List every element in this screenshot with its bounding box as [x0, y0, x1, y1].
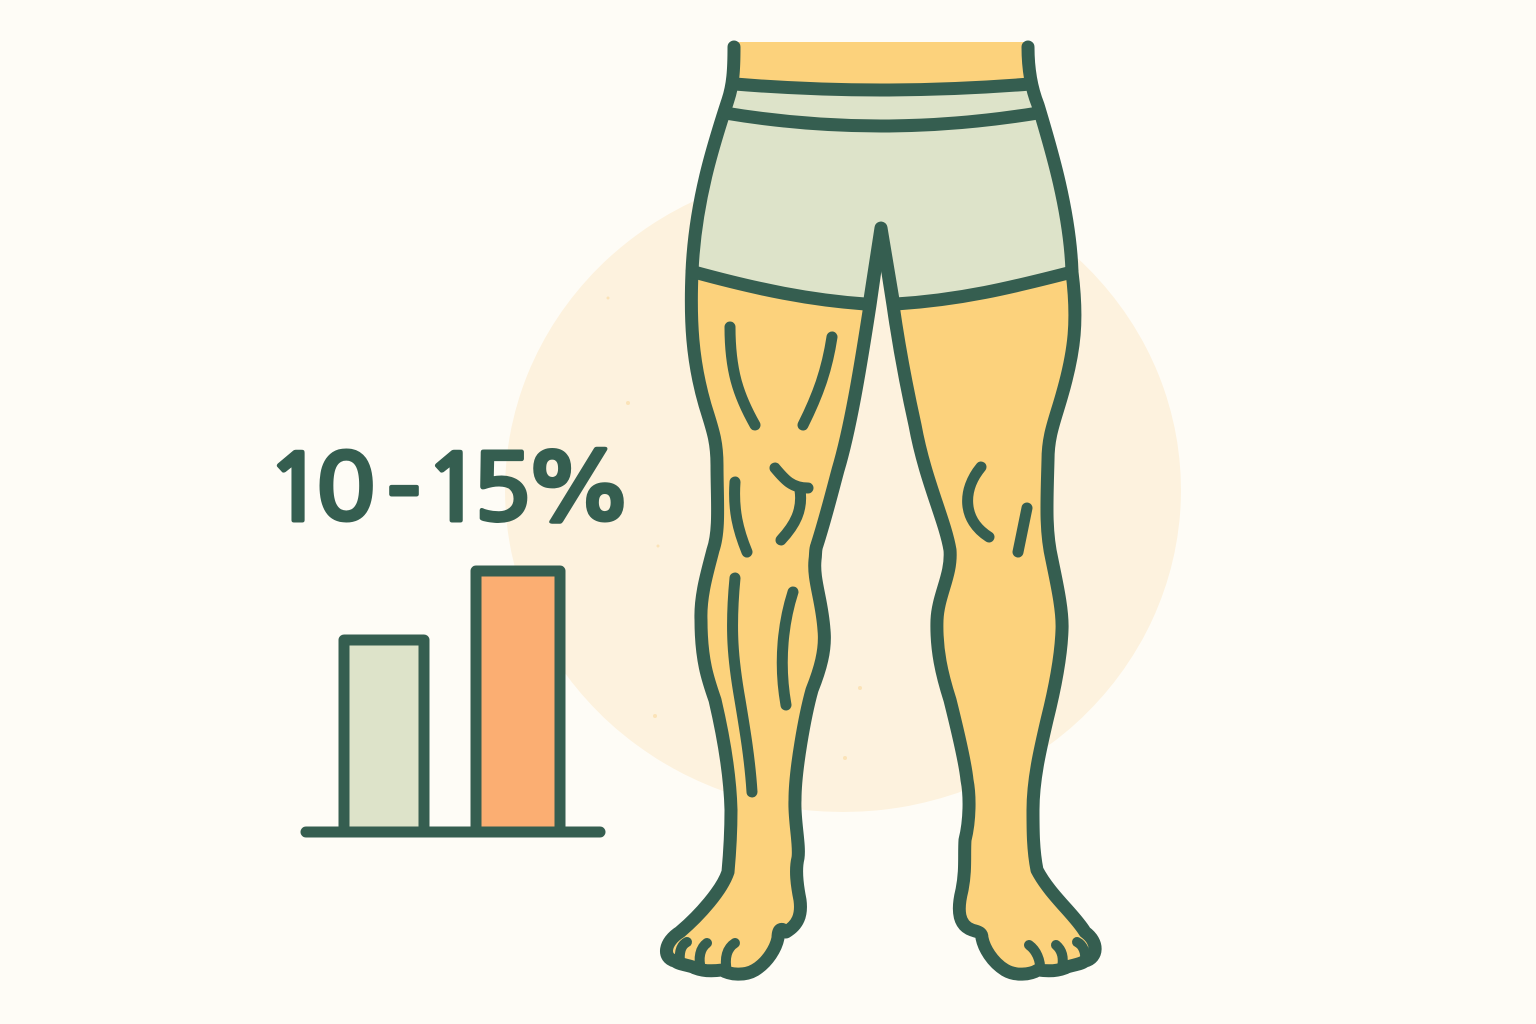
background circle: [505, 168, 1181, 812]
shorts fill: [692, 85, 1072, 304]
left foot toes: [680, 942, 735, 971]
illustration: legs wearing shorts: [666, 42, 1095, 974]
right leg: [881, 228, 1095, 974]
bar: higher: [476, 571, 560, 832]
bar chart: [306, 571, 600, 832]
right foot toes: [1029, 942, 1085, 971]
waist skin: [737, 42, 1026, 92]
left leg muscle lines: [730, 327, 832, 792]
left leg: [666, 228, 881, 974]
statistic label: 10-15%: [265, 443, 634, 541]
right leg muscle lines: [968, 467, 1027, 552]
shorts outline: [692, 47, 1072, 306]
bar chart baseline: [306, 826, 600, 838]
bar: lower: [344, 640, 424, 832]
